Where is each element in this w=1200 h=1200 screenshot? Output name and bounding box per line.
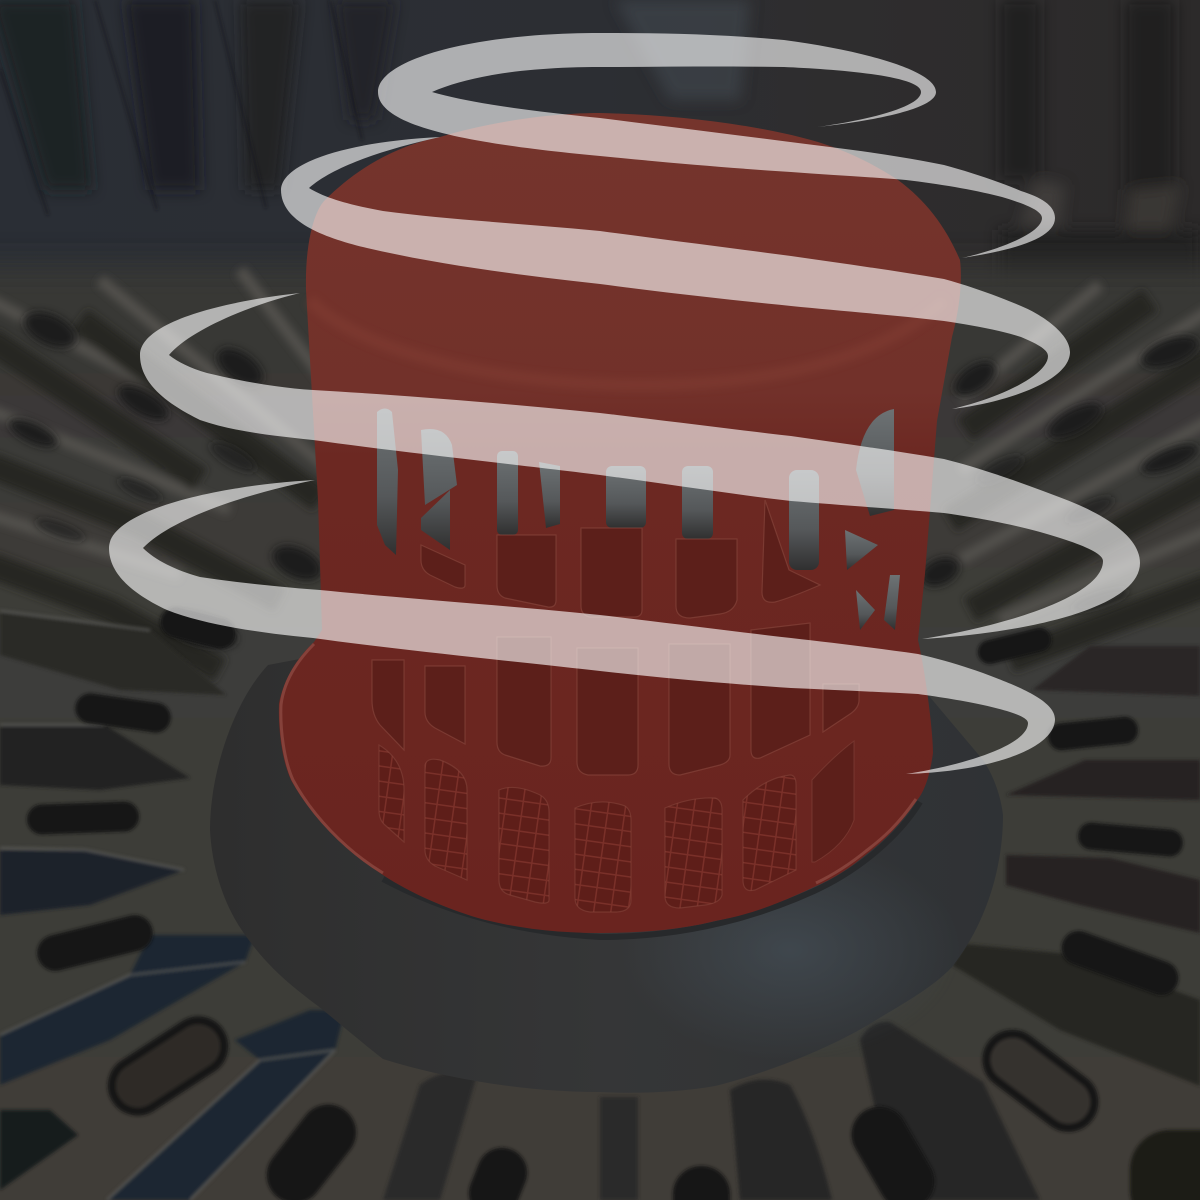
flange shadow rim bbox=[383, 802, 920, 937]
lid edge highlight bbox=[310, 300, 945, 385]
radial ribs of the grate bbox=[0, 611, 1200, 1200]
grate slots bbox=[27, 604, 1200, 1200]
swirl band 3 bbox=[140, 293, 1140, 639]
flange rim highlight bbox=[281, 644, 383, 873]
swirl: air flow lines bbox=[109, 33, 1140, 774]
open upper windows bbox=[377, 408, 900, 630]
background: oven back wall bbox=[0, 0, 1200, 340]
basket base flange bbox=[210, 640, 1003, 1093]
red basket bbox=[279, 113, 961, 933]
swirl band 1 bbox=[378, 33, 1055, 258]
lower mesh windows bbox=[379, 745, 796, 912]
swirl band 2 bbox=[281, 137, 1070, 409]
swirl band 4 bbox=[109, 480, 1055, 774]
right lower dark window bbox=[812, 741, 854, 862]
far slots bbox=[5, 305, 1200, 655]
basket body bbox=[279, 113, 961, 933]
background: perforated floor bbox=[0, 265, 1200, 1200]
right flange rim highlight bbox=[816, 799, 916, 883]
darker inner windows bbox=[372, 500, 859, 775]
